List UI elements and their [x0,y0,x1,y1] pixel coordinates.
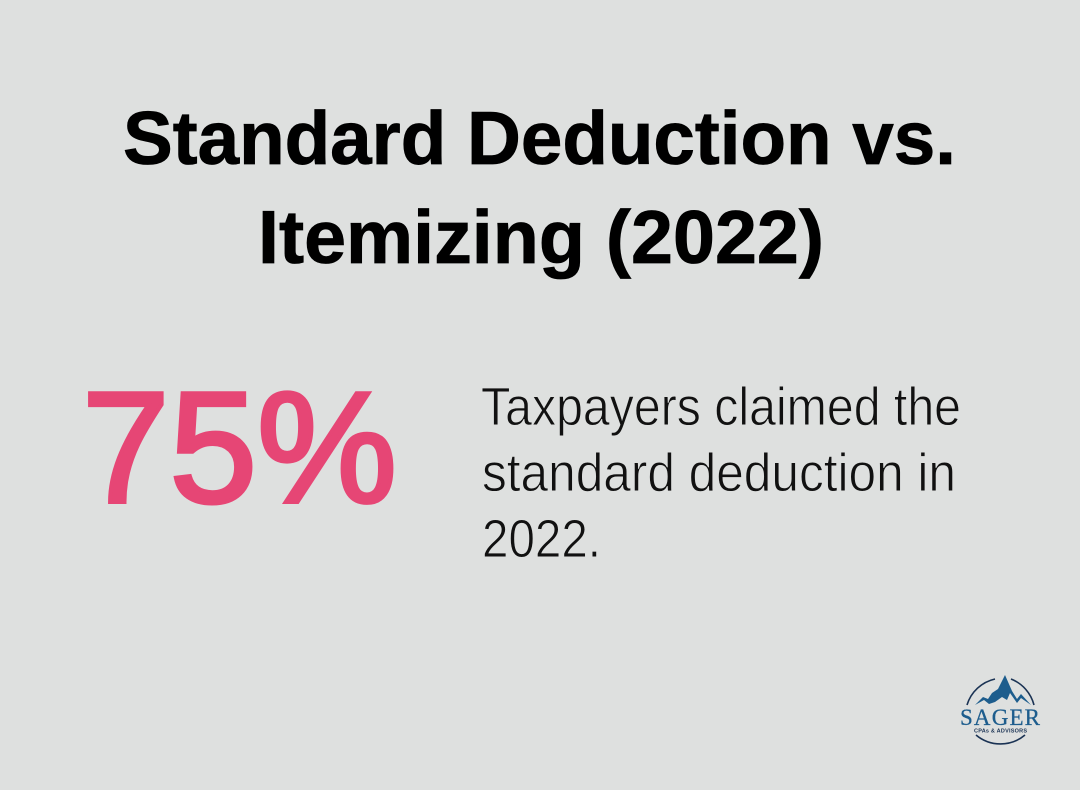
title [123,96,956,279]
description text [481,377,961,569]
title: Standard Deduction vs. [123,96,956,180]
statistic: 75%: 75% [82,360,397,536]
logo: Sager CPAs & Advisors [960,675,1041,744]
logo tagline: CPAs & ADVISORS [974,728,1027,734]
icon: ring arcs [967,679,1034,744]
description text: standard deduction in [482,443,956,503]
logo wordmark: SAGER [960,705,1041,730]
description text: 2022. [482,509,601,569]
description text: Taxpayers claimed the [481,377,961,437]
icon: mountain [975,675,1031,705]
title: Itemizing (2022) [258,195,824,279]
